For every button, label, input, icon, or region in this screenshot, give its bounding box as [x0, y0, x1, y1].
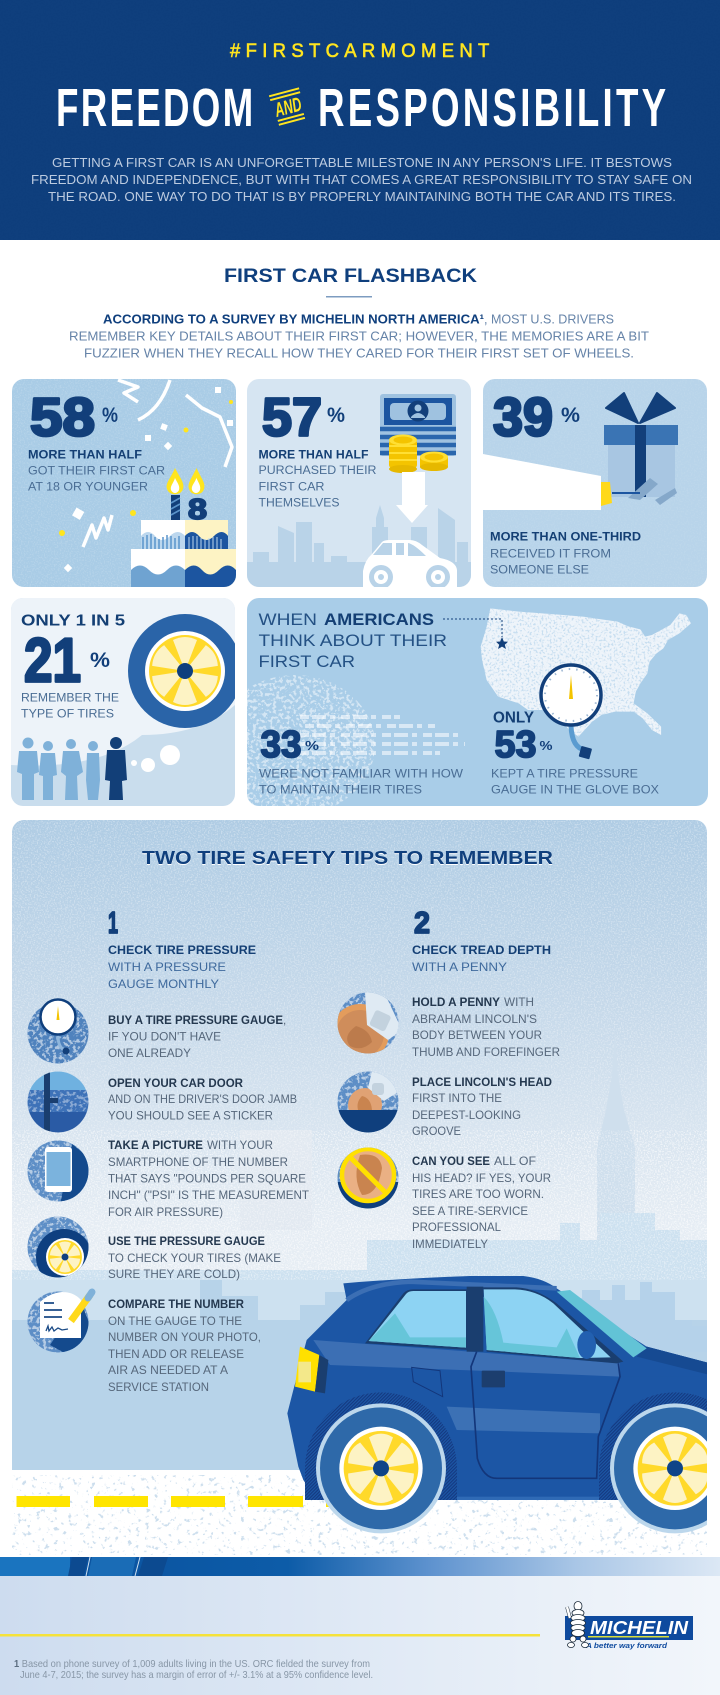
panel: 21 percent: [11, 598, 242, 806]
footnote: June 4-7, 2015; the survey has a margin of error of +/- 3.1% at a 95% confidence level.: [20, 1670, 373, 1681]
illustration: blue car: [287, 1276, 720, 1533]
step: take a picture: THAT SAYS "POUNDS PER SQUARE: [108, 1173, 306, 1186]
step: buy a gauge: ONE ALREADY: [108, 1047, 191, 1060]
icon: penny in groove: [337, 1071, 399, 1134]
michelin logo: [565, 1602, 693, 1650]
heading text: THINK ABOUT THEIR: [258, 632, 447, 650]
big number 21: 21: [24, 626, 81, 696]
road dashes: [16, 1496, 356, 1507]
header intro text: [31, 155, 692, 204]
column 2 heading: [412, 905, 551, 974]
icon: notepad and pencil: [27, 1291, 92, 1356]
header intro text: FREEDOM AND INDEPENDENCE, BUT WITH THAT COMES A GREAT RESPONSIBILITY TO STAY SAFE ON: [31, 172, 692, 187]
panel text: MORE THAN ONE-THIRD: [490, 530, 641, 544]
heading text: WHEN: [258, 611, 317, 629]
step: buy a gauge: BUY A TIRE PRESSURE GAUGE: [108, 1014, 283, 1027]
skyline background: [12, 1030, 707, 1472]
footer strip: [0, 1557, 720, 1576]
step: hold a penny: BODY BETWEEN YOUR: [412, 1029, 542, 1042]
step: use gauge: TO CHECK YOUR TIRES (MAKE: [108, 1252, 281, 1265]
panel: when americans: [247, 598, 708, 806]
stat: only 53 percent: %: [540, 738, 553, 753]
step: take a picture: TAKE A PICTURE: [108, 1139, 203, 1152]
column 2 heading: WITH A PENNY: [412, 961, 507, 974]
step: use gauge: SURE THEY ARE COLD): [108, 1268, 240, 1281]
main title: [56, 77, 666, 138]
panel text: TYPE OF TIRES: [21, 706, 114, 720]
door outline: [471, 1352, 620, 1478]
confetti: [59, 380, 233, 572]
step: compare: COMPARE THE NUMBER: [108, 1298, 245, 1311]
icon: tire check: [27, 1216, 92, 1285]
stat: 33 percent: TO MAINTAIN THEIR TIRES: [259, 782, 422, 796]
footnote: 1 Based on phone survey of 1,009 adults living in the US. ORC fielded the survey from: [14, 1659, 370, 1670]
step: can you see: PROFESSIONAL: [412, 1221, 502, 1234]
icon: AND lockup: [269, 88, 307, 125]
heading: first car flashback: FIRST CAR FLASHBACK: [224, 266, 477, 287]
panel: 57 percent: %: [327, 404, 345, 427]
step: compare: ON THE GAUGE TO THE: [108, 1315, 242, 1328]
icon: cash and coins: [380, 394, 456, 473]
panel: 58 percent: [12, 379, 236, 587]
step: place head: DEEPEST-LOOKING: [412, 1109, 521, 1122]
stat: 33 percent: WERE NOT FAMILIAR WITH HOW: [259, 766, 464, 780]
icon: pressure gauge: [541, 665, 601, 759]
panel text: SOMEONE ELSE: [490, 562, 589, 576]
icon: birthday cake: [131, 468, 236, 587]
step: can you see: SEE A TIRE-SERVICE: [412, 1205, 528, 1218]
icon: arrow down: [396, 472, 428, 523]
flashback intro text: ACCORDING TO A SURVEY BY MICHELIN NORTH AMERICA¹: [103, 312, 484, 326]
step: compare: THEN ADD OR RELEASE: [108, 1348, 244, 1361]
panel text: RECEIVED IT FROM: [490, 546, 611, 560]
step: take a picture: WITH YOUR: [207, 1139, 273, 1152]
panel: tire safety tips: [12, 820, 720, 1560]
header intro text: GETTING A FIRST CAR IS AN UNFORGETTABLE MILESTONE IN ANY PERSON'S LIFE. IT BESTOWS: [52, 155, 672, 170]
icon: light beam and flashlight: [483, 454, 612, 510]
step: open door: OPEN YOUR CAR DOOR: [108, 1077, 244, 1090]
tips heading: TWO TIRE SAFETY TIPS TO REMEMBER: [142, 848, 553, 869]
panel text: MORE THAN HALF: [28, 448, 142, 462]
step: compare: AIR AS NEEDED AT A: [108, 1364, 228, 1377]
step: compare: NUMBER ON YOUR PHOTO,: [108, 1331, 261, 1344]
panel: 58 percent: %: [102, 404, 118, 427]
step: place head: FIRST INTO THE: [412, 1092, 502, 1105]
panel text: [258, 448, 377, 510]
step: take a picture: INCH" ("PSI" IS THE MEASUREMENT: [108, 1189, 309, 1202]
step: use gauge: [108, 1235, 281, 1281]
stat: only 53 percent: [491, 710, 659, 796]
icon: no penny sign: [337, 1147, 399, 1210]
body stripes: [313, 1340, 620, 1377]
panel text: PURCHASED THEIR: [258, 463, 377, 477]
hashtag: #FIRSTCARMOMENT: [230, 41, 490, 62]
main title: FREEDOM: [56, 77, 253, 138]
panel: 57 percent: [247, 379, 471, 589]
main title: RESPONSIBILITY: [318, 77, 666, 138]
icon: gift box: [604, 393, 678, 505]
stat: 33 percent: 33: [260, 724, 302, 766]
icon: AND lockup: AND: [272, 94, 304, 122]
stat: only 53 percent: ONLY: [493, 710, 535, 726]
step: buy a gauge: ,: [283, 1014, 286, 1027]
flashback intro text: REMEMBER KEY DETAILS ABOUT THEIR FIRST CAR; HOWEVER, THE MEMORIES ARE A BIT: [69, 330, 649, 344]
lamp: [295, 1347, 319, 1392]
panel text: AT 18 OR YOUNGER: [28, 480, 148, 494]
step: compare: [108, 1298, 261, 1394]
panel text: GOT THEIR FIRST CAR: [28, 464, 165, 478]
panel text: FIRST CAR: [258, 480, 325, 494]
panel text: [21, 693, 118, 718]
step: place head: GROOVE: [412, 1125, 461, 1138]
step: take a picture: FOR AIR PRESSURE): [108, 1206, 223, 1219]
big number 57: 57: [262, 388, 322, 448]
candles: 8: [188, 494, 207, 526]
road: [12, 1470, 707, 1560]
column 2 heading: CHECK TREAD DEPTH: [412, 944, 551, 957]
step: place head: PLACE LINCOLN'S HEAD: [412, 1076, 552, 1089]
stat: only 53 percent: 53: [494, 724, 536, 766]
icon: tire: [128, 614, 242, 728]
column 2 heading: 2: [414, 905, 430, 940]
icon: smartphone: [28, 1140, 88, 1202]
panel text: [28, 450, 164, 490]
step: can you see: IMMEDIATELY: [412, 1238, 488, 1251]
panel: 21 percent: %: [90, 649, 110, 672]
step: can you see: CAN YOU SEE: [412, 1155, 490, 1168]
car body: [287, 1276, 710, 1500]
us map: [480, 605, 695, 738]
stat: 33 percent: [259, 730, 463, 794]
footnote: [14, 1659, 373, 1681]
panel text: THEMSELVES: [258, 496, 340, 510]
text: only 1 in 5: ONLY 1 IN 5: [21, 612, 125, 630]
step: hold a penny: THUMB AND FOREFINGER: [412, 1046, 560, 1059]
step: hold a penny: WITH: [504, 996, 534, 1009]
step: hold a penny: [412, 996, 560, 1059]
step: open door: YOU SHOULD SEE A STICKER: [108, 1110, 273, 1123]
stat: only 53 percent: KEPT A TIRE PRESSURE: [491, 766, 638, 780]
tire tracks: [247, 675, 465, 806]
step: open door: [108, 1077, 297, 1123]
heading text: [258, 614, 446, 667]
dotted leader and star: [443, 619, 508, 649]
flashback intro text: FUZZIER WHEN THEY RECALL HOW THEY CARED FOR THEIR FIRST SET OF WHEELS.: [84, 346, 634, 360]
step: take a picture: SMARTPHONE OF THE NUMBER: [108, 1156, 288, 1169]
big number 39: 39: [493, 388, 553, 448]
step: can you see: [412, 1155, 551, 1251]
big number 58: 58: [30, 388, 95, 448]
step: buy a gauge: [108, 1014, 286, 1060]
heading text: FIRST CAR: [258, 653, 355, 671]
step: hold a penny: ABRAHAM LINCOLN'S: [412, 1013, 537, 1026]
thought bubble: [11, 598, 235, 772]
tips heading: TWO TIRE SAFETY TIPS TO REMEMBER: [142, 847, 553, 868]
step: take a picture: [108, 1139, 309, 1219]
windows: [365, 1289, 468, 1350]
stat: only 53 percent: GAUGE IN THE GLOVE BOX: [491, 782, 659, 796]
icon: people silhouettes: [17, 737, 127, 800]
footer panel: [0, 1576, 720, 1695]
rear wheel: [305, 1392, 457, 1533]
icon: bibendum: [567, 1602, 588, 1648]
step: open door: AND ON THE DRIVER'S DOOR JAMB: [108, 1093, 297, 1106]
step: can you see: HIS HEAD? IF YES, YOUR: [412, 1172, 551, 1185]
column 1 heading: CHECK TIRE PRESSURE: [108, 944, 256, 957]
header banner: [0, 0, 720, 240]
panel text: REMEMBER THE: [21, 690, 119, 704]
step: compare: SERVICE STATION: [108, 1381, 209, 1394]
column 1 heading: WITH A PRESSURE: [108, 961, 226, 974]
icon: white car: [363, 540, 457, 589]
icon: penny held: [331, 992, 402, 1062]
icon: gauge: [27, 1000, 89, 1064]
heading text: AMERICANS: [324, 611, 434, 629]
icon: car door: [27, 1071, 89, 1133]
flashback intro text: , MOST U.S. DRIVERS: [484, 312, 614, 326]
column 1 heading: [108, 905, 256, 991]
michelin logo: MICHELIN: [590, 1618, 689, 1638]
column 1 heading: GAUGE MONTHLY: [108, 978, 219, 991]
flashback intro text: [69, 312, 649, 360]
step: buy a gauge: IF YOU DON'T HAVE: [108, 1031, 221, 1044]
step: can you see: TIRES ARE TOO WORN.: [412, 1188, 544, 1201]
step: place head: [412, 1076, 552, 1138]
panel: 39 percent: %: [561, 404, 580, 427]
stat: 33 percent: %: [305, 738, 320, 753]
column 1 heading: 1: [108, 905, 118, 940]
step: use gauge: USE THE PRESSURE GAUGE: [108, 1235, 265, 1248]
skyline: [247, 505, 471, 587]
panel: 39 percent: [483, 379, 707, 587]
front wheel: [599, 1392, 720, 1533]
panel text: [490, 532, 640, 574]
panel text: MORE THAN HALF: [258, 448, 368, 462]
step: hold a penny: HOLD A PENNY: [412, 996, 500, 1009]
step: can you see: ALL OF: [494, 1155, 536, 1168]
header intro text: THE ROAD. ONE WAY TO DO THAT IS BY PROPERLY MAINTAINING BOTH THE CAR AND ITS TIRES.: [48, 189, 676, 204]
michelin logo: A better way forward: [585, 1641, 667, 1650]
